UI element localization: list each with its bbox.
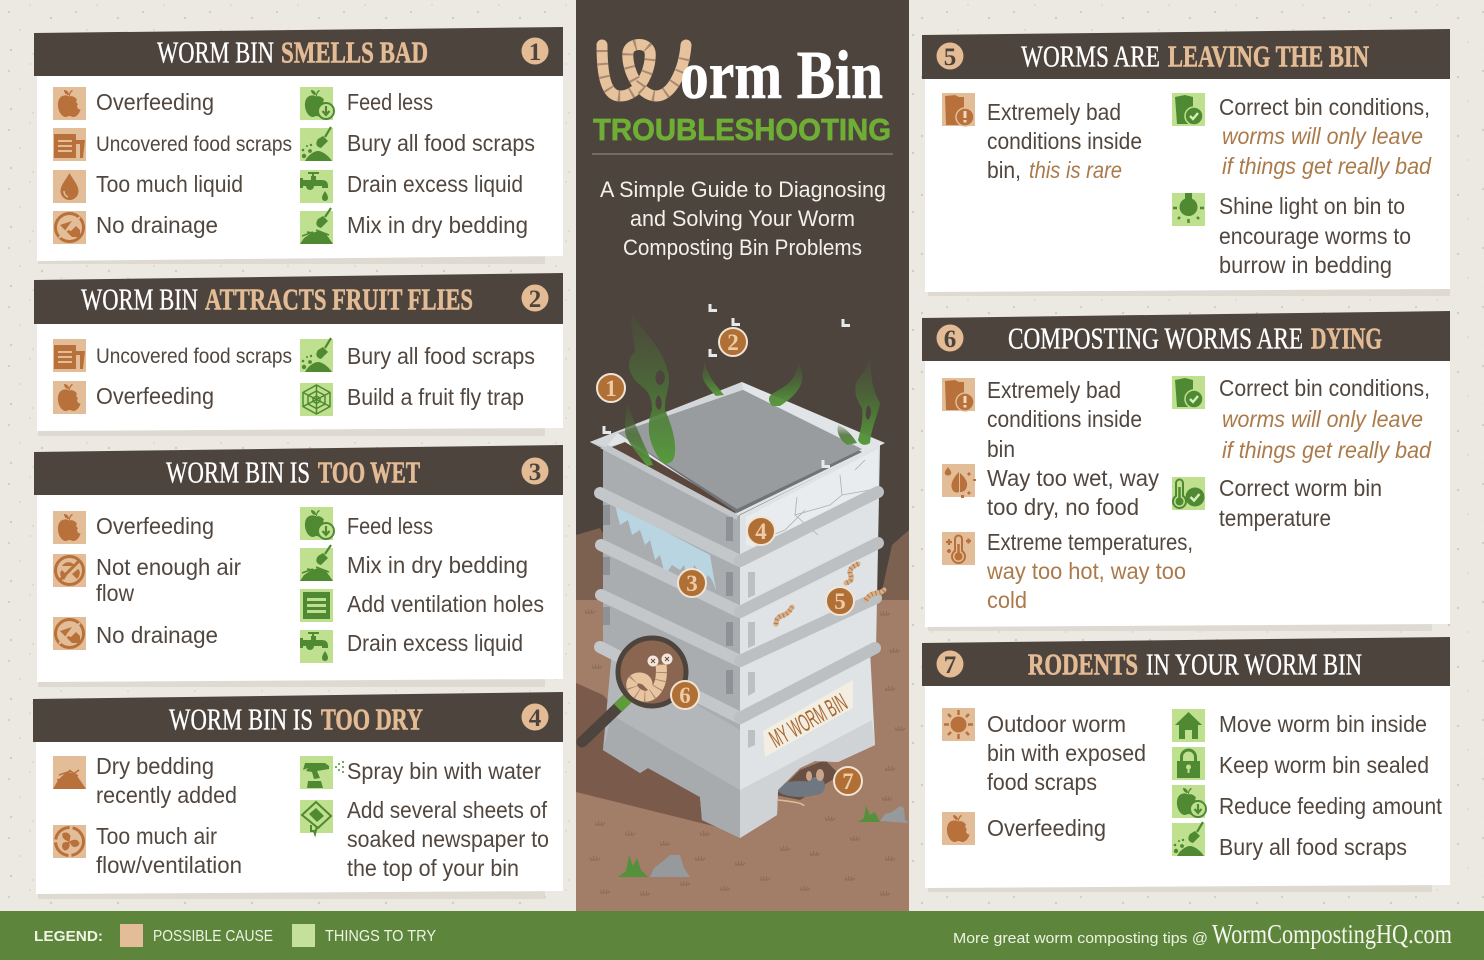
icon: mix dry bedding <box>300 208 333 244</box>
icon: uncovered food scraps <box>53 339 86 372</box>
icon: drain liquid <box>300 630 333 663</box>
tray tabs <box>603 505 755 748</box>
text: correct conditions: Correct bin conditions, <box>1219 94 1430 120</box>
rat under bin <box>777 769 825 806</box>
heading bar 6: DYING <box>1311 320 1382 356</box>
icon: shine light <box>1172 193 1205 226</box>
callout 6: 6 <box>679 683 691 708</box>
text: soaked newspaper: the top of your bin <box>347 855 519 881</box>
text: not enough air flow: Not enough air <box>96 554 241 580</box>
text: extremely bad conditions: bin <box>987 436 1015 462</box>
text: ventilation holes: Add ventilation holes <box>347 591 544 617</box>
icon: ventilation holes <box>300 589 333 622</box>
text: extremely bad conditions: Extremely bad <box>987 377 1121 403</box>
legend <box>34 924 436 947</box>
ground <box>576 600 909 911</box>
text: overfeeding: Overfeeding <box>96 89 214 115</box>
text: extremely bad conditions: conditions inside <box>987 406 1142 432</box>
icon: bad conditions <box>942 378 975 411</box>
ground tufts <box>585 609 905 895</box>
icon: overfeeding <box>53 381 86 414</box>
panel: worms are dying <box>922 311 1450 631</box>
text: shine light: burrow in bedding <box>1219 252 1392 278</box>
heading bar 7 <box>922 637 1450 686</box>
icon: uncovered food scraps <box>53 128 86 161</box>
text: correct conditions: if things get really bad <box>1222 437 1432 463</box>
callout 5 <box>826 587 854 615</box>
icon: dry bedding <box>53 756 86 789</box>
text: too much air flow: Too much air <box>96 823 217 849</box>
icon: reduce feeding <box>1172 785 1206 818</box>
icon: overfeeding <box>53 511 86 544</box>
icon: feed less <box>300 87 334 120</box>
icon: correct conditions <box>1172 93 1205 126</box>
smoke wisps <box>625 313 880 466</box>
tagline: and Solving Your Worm <box>630 206 855 231</box>
tagline: Composting Bin Problems <box>623 235 862 260</box>
text: extreme temperatures: way too hot, way too <box>986 558 1186 584</box>
icon: too much liquid <box>53 170 86 203</box>
icon: correct conditions <box>1172 376 1205 409</box>
text: too much air flow: flow/ventilation <box>96 852 242 878</box>
callout 4: 4 <box>755 519 767 544</box>
callout 2: 2 <box>727 330 739 355</box>
text: wet dry no food: too dry, no food <box>987 494 1139 520</box>
icon: mix dry bedding <box>300 545 333 581</box>
text: no drainage: No drainage <box>96 212 218 238</box>
heading bar 7: 7 <box>944 652 956 679</box>
text: move inside: Move worm bin inside <box>1219 711 1427 737</box>
tagline <box>600 177 886 260</box>
text: correct conditions <box>1219 375 1432 463</box>
panel: too dry <box>33 692 563 899</box>
icon: lock <box>1172 747 1205 780</box>
text: fruit fly trap: Build a fruit fly trap <box>347 384 524 410</box>
text: not enough air flow <box>96 554 241 606</box>
lid <box>590 382 885 520</box>
base of bin <box>603 650 875 838</box>
text: correct conditions: if things get really bad <box>1222 153 1432 179</box>
heading bar 3 <box>34 445 563 495</box>
text: wet dry no food: Way too wet, way <box>987 465 1159 491</box>
text: shine light: Shine light on bin to <box>1219 193 1405 219</box>
heading bar 7: IN YOUR WORM BIN <box>1146 646 1362 682</box>
heading bar 6: COMPOSTING WORMS ARE <box>1008 320 1303 356</box>
tagline: A Simple Guide to Diagnosing <box>600 177 886 202</box>
text: extremely bad conditions: this is rare <box>1029 157 1122 183</box>
text: correct temperature: temperature <box>1219 505 1331 531</box>
callout 3: 3 <box>686 571 698 596</box>
panel: worms leaving the bin <box>922 29 1450 296</box>
flies <box>604 304 850 466</box>
icon: no drainage <box>53 211 86 244</box>
callout 5: 5 <box>834 589 846 614</box>
heading bar 4: TOO DRY <box>321 702 423 736</box>
text: outdoor bin: food scraps <box>987 769 1097 795</box>
text: outdoor bin <box>987 711 1146 795</box>
tray rims <box>600 492 878 718</box>
legend: LEGEND: <box>34 928 103 945</box>
legend: POSSIBLE CAUSE <box>153 928 273 945</box>
icon: outdoor sun <box>942 708 975 741</box>
text: drain liquid: Drain excess liquid <box>347 171 523 197</box>
text: extreme temperatures: Extreme temperatures, <box>987 529 1193 555</box>
heading bar 6 <box>922 311 1450 361</box>
heading bar 7: RODENTS <box>1028 646 1138 682</box>
text: correct conditions: worms will only leave <box>1222 406 1423 432</box>
website credit <box>953 919 1452 949</box>
heading bar 4: WORM BIN IS <box>169 702 313 736</box>
text: spray bin: Spray bin with water <box>347 758 541 784</box>
text: soaked newspaper: Add several sheets of <box>347 797 548 823</box>
panel: attracts fruit flies <box>34 273 563 436</box>
text: feed less: Feed less <box>347 513 433 539</box>
icon: spray bottle <box>300 756 344 789</box>
text: correct conditions <box>1219 94 1432 179</box>
icon: correct temperature <box>1172 477 1205 510</box>
text: uncovered food scraps: Uncovered food scraps <box>96 133 292 156</box>
icon: soaked newspaper <box>300 800 333 834</box>
icon: overfeeding <box>942 812 975 845</box>
heading bar 2 <box>34 273 563 324</box>
text: extreme temperatures: cold <box>987 587 1027 613</box>
icon: drain liquid <box>300 170 333 203</box>
callout 2 <box>719 328 747 356</box>
heading bar 1: WORM BIN <box>157 34 274 70</box>
heading bar 5: LEAVING THE BIN <box>1168 38 1369 74</box>
text: dry bedding: recently added <box>96 782 237 808</box>
heading bar 3: 3 <box>529 459 541 486</box>
sign: my worm bin <box>763 680 853 757</box>
sign: my worm bin: MY WORM BIN <box>765 688 852 753</box>
website credit: More great worm composting tips @ <box>953 930 1208 947</box>
text: mix dry bedding: Mix in dry bedding <box>347 552 528 578</box>
text: soaked newspaper: soaked newspaper to <box>347 826 549 852</box>
icon: wet dry no food <box>942 464 976 498</box>
text: keep sealed: Keep worm bin sealed <box>1219 752 1429 778</box>
icon: fruit fly trap <box>300 383 333 416</box>
text: extremely bad conditions: conditions inside <box>987 128 1142 154</box>
icon: house <box>1172 709 1205 742</box>
text: extreme temperatures <box>986 529 1193 613</box>
icon: bury food scraps <box>300 127 333 161</box>
icon: feed less <box>300 507 334 540</box>
heading bar 1: 1 <box>529 39 541 66</box>
footer bar <box>0 911 1484 960</box>
trays <box>603 445 880 730</box>
cracks on top tray <box>746 449 878 548</box>
far hills <box>576 528 909 600</box>
panel: too wet <box>34 445 563 687</box>
worms climbing out <box>776 564 884 624</box>
heading bar 2: WORM BIN <box>81 282 198 316</box>
heading bar 1 <box>34 27 563 76</box>
text: outdoor bin: bin with exposed <box>987 740 1146 766</box>
text: overfeeding: Overfeeding <box>96 383 214 409</box>
text: extremely bad conditions: Extremely bad <box>987 99 1121 125</box>
icon: too much air flow <box>53 825 86 858</box>
text: bury food scraps: Bury all food scraps <box>347 130 535 156</box>
text: dry bedding: Dry bedding <box>96 753 214 779</box>
rocks and grass <box>618 806 910 877</box>
magnifying glass with dying worm <box>582 638 686 742</box>
subtitle: troubleshooting: TROUBLESHOOTING <box>593 112 891 147</box>
text: shine light: encourage worms to <box>1219 223 1411 249</box>
text: dry bedding <box>96 753 237 808</box>
text: bury food scraps: Bury all food scraps <box>347 343 535 369</box>
bin shadow <box>576 683 740 838</box>
callout 6 <box>671 681 699 709</box>
icon: overfeeding <box>53 87 86 120</box>
text: too much air flow <box>96 823 242 878</box>
text: overfeeding: Overfeeding <box>96 513 214 539</box>
text: correct temperature: Correct worm bin <box>1219 475 1382 501</box>
callout 7 <box>834 767 862 795</box>
title: worm bin <box>602 37 883 113</box>
text: extremely bad conditions: bin, <box>987 157 1021 183</box>
heading bar 1: SMELLS BAD <box>281 34 428 70</box>
text: extremely bad conditions <box>987 99 1142 183</box>
icon: no drainage <box>53 617 86 650</box>
panel: rodents <box>922 637 1450 892</box>
ice dripping <box>615 505 716 590</box>
text: reduce feeding: Reduce feeding amount <box>1219 793 1443 819</box>
text: wet dry no food <box>987 465 1159 520</box>
callout 1 <box>597 374 625 402</box>
text: not enough air flow: flow <box>96 580 134 606</box>
shadow under right foot <box>775 760 840 800</box>
text: correct conditions: worms will only leave <box>1222 123 1423 149</box>
panel: worm bin smells bad <box>34 27 563 264</box>
heading bar 5: 5 <box>944 44 956 71</box>
text: bury food scraps: Bury all food scraps <box>1219 834 1407 860</box>
heading bar 3: WORM BIN IS <box>166 454 310 490</box>
text: correct conditions: Correct bin conditions, <box>1219 375 1430 401</box>
heading bar 5: WORMS ARE <box>1021 38 1160 74</box>
heading bar 3: TOO WET <box>318 454 420 490</box>
text: outdoor bin: Outdoor worm <box>987 711 1126 737</box>
heading bar 4 <box>33 692 563 742</box>
callout 4 <box>747 517 775 545</box>
heading bar 4: 4 <box>529 705 542 732</box>
callout 7: 7 <box>842 769 854 794</box>
heading bar 2: 2 <box>529 286 541 313</box>
centre column with bin illustration <box>576 0 910 911</box>
heading bar 6: 6 <box>944 326 956 353</box>
text: extremely bad conditions <box>987 377 1142 462</box>
icon: bury food scraps <box>1172 822 1205 856</box>
text: no drainage: No drainage <box>96 622 218 648</box>
worm letter W <box>602 44 686 96</box>
text: feed less: Feed less <box>347 89 433 115</box>
text: too much liquid: Too much liquid <box>96 171 243 197</box>
callout 1: 1 <box>605 376 617 401</box>
icon: extreme temperatures <box>942 532 975 565</box>
text: shine light <box>1219 193 1411 278</box>
text: drain liquid: Drain excess liquid <box>347 630 523 656</box>
icon: not enough air <box>53 554 86 587</box>
word: orm bin: orm Bin <box>680 37 883 113</box>
heading bar 2: ATTRACTS FRUIT FLIES <box>205 282 473 316</box>
text: soaked newspaper <box>347 797 549 881</box>
callout 3 <box>678 569 706 597</box>
legend: THINGS TO TRY <box>325 928 436 945</box>
text: uncovered food scraps: Uncovered food scraps <box>96 345 292 368</box>
icon: bad conditions <box>942 93 975 126</box>
icon: bury food scraps <box>300 338 333 372</box>
heading bar 5 <box>922 29 1450 79</box>
text: mix dry bedding: Mix in dry bedding <box>347 212 528 238</box>
text: correct temperature <box>1219 475 1382 531</box>
text: overfeeding: Overfeeding <box>987 815 1106 841</box>
